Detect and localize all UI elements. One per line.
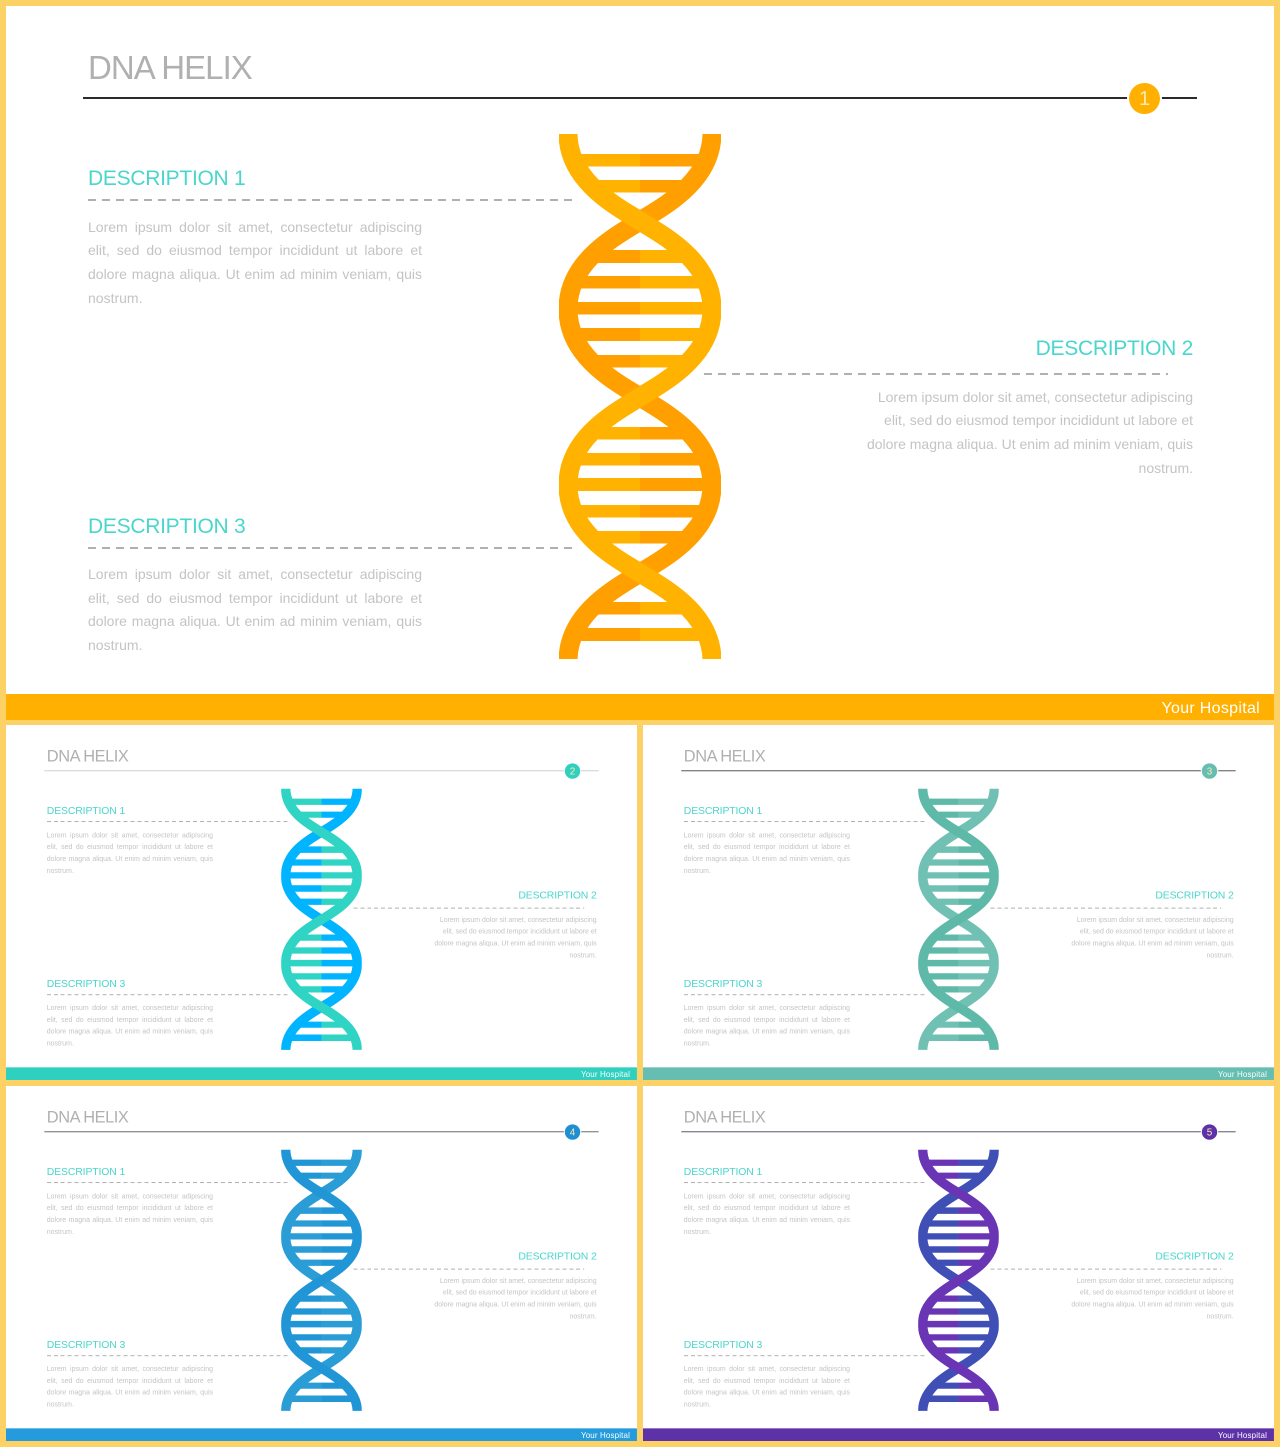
text block: description 1: elit, sed do eiusmod tempor incididunt ut labore et <box>684 843 850 850</box>
panel: slide 5, purple and indigo helix <box>643 1086 1274 1441</box>
text block: description 3 <box>684 1004 850 1047</box>
text block: description 1: elit, sed do eiusmod tempor incididunt ut labore et <box>684 1204 850 1211</box>
leader line: description 3 <box>684 993 927 996</box>
text block: description 3: Lorem ipsum dolor sit amet, consectetur adipiscing <box>47 1365 213 1373</box>
text block: description 3: dolore magna aliqua. Ut enim ad minim veniam, quis <box>88 613 422 629</box>
text block: description 3: nostrum. <box>47 1400 74 1408</box>
text block: description 1: dolore magna aliqua. Ut enim ad minim veniam, quis <box>684 1215 850 1223</box>
leader line: description 3 <box>88 547 576 549</box>
heading: description 1: DESCRIPTION 1 <box>684 1166 762 1178</box>
heading: description 3: DESCRIPTION 3 <box>684 978 762 990</box>
heading: DNA helix: DNA HELIX <box>684 1107 765 1126</box>
text block: description 3: Lorem ipsum dolor sit amet, consectetur adipiscing <box>684 1365 850 1373</box>
text block: description 1: nostrum. <box>47 866 74 874</box>
icon: DNA double helix <box>559 134 721 659</box>
text block: description 2: dolore magna aliqua. Ut enim ad minim veniam, quis <box>434 939 597 947</box>
leader line: description 3 <box>47 1354 290 1357</box>
text block: description 2: nostrum. <box>1207 951 1234 959</box>
text block: description 3: nostrum. <box>684 1039 711 1047</box>
text block: description 2 <box>434 915 597 959</box>
number badge 1: 1 <box>1139 88 1150 110</box>
heading: description 2: DESCRIPTION 2 <box>1155 890 1234 901</box>
heading: description 1: DESCRIPTION 1 <box>47 1166 125 1178</box>
text block: description 1: nostrum. <box>684 1227 711 1235</box>
text block: description 3: Lorem ipsum dolor sit amet, consectetur adipiscing <box>684 1004 850 1012</box>
text block: description 1 <box>47 1192 213 1235</box>
text block: description 1 <box>684 831 850 874</box>
text block: description 3: elit, sed do eiusmod tempor incididunt ut labore et <box>47 1015 213 1023</box>
text block: description 2: elit, sed do eiusmod tempor incididunt ut labore et <box>1080 927 1234 935</box>
text block: description 2 <box>1071 1276 1234 1320</box>
leader line: description 3 <box>47 993 290 996</box>
text block: description 2: nostrum. <box>570 951 597 959</box>
panel: slide 2, teal and blue helix <box>6 725 637 1080</box>
text block: description 2: dolore magna aliqua. Ut enim ad minim veniam, quis <box>1071 939 1234 947</box>
footer bar <box>643 1428 1274 1441</box>
text block: description 3 <box>684 1365 850 1408</box>
text block: description 1 <box>47 831 213 874</box>
panel: slide 4, blue helix <box>6 1086 637 1441</box>
text block: description 1: elit, sed do eiusmod tempor incididunt ut labore et <box>47 1204 213 1211</box>
number badge 4 <box>565 1124 580 1139</box>
text block: description 3: Lorem ipsum dolor sit amet, consectetur adipiscing <box>47 1004 213 1012</box>
text block: description 1 <box>684 1192 850 1235</box>
text block: description 2 <box>867 388 1193 476</box>
heading: description 3: DESCRIPTION 3 <box>88 515 245 538</box>
leader line: description 1 <box>684 1181 927 1184</box>
text block: description 2: Lorem ipsum dolor sit amet, consectetur adipiscing <box>1077 915 1234 923</box>
text block: description 1: Lorem ipsum dolor sit amet, consectetur adipiscing <box>684 1192 850 1200</box>
text block: description 3: dolore magna aliqua. Ut enim ad minim veniam, quis <box>684 1027 850 1035</box>
heading: DNA helix: DNA HELIX <box>47 746 128 765</box>
text block: description 1: nostrum. <box>47 1227 74 1235</box>
text block: description 2: nostrum. <box>570 1312 597 1320</box>
text block: description 1: dolore magna aliqua. Ut enim ad minim veniam, quis <box>47 854 213 862</box>
number badge 5: 5 <box>1207 1127 1212 1138</box>
header rule <box>681 769 1236 772</box>
footer bar <box>6 1067 637 1080</box>
text block: description 1: Lorem ipsum dolor sit amet, consectetur adipiscing <box>47 1192 213 1200</box>
text block: description 2: Lorem ipsum dolor sit amet, consectetur adipiscing <box>440 1276 597 1284</box>
text block: description 1 <box>88 218 422 306</box>
leader line: description 1 <box>88 199 576 201</box>
text block: description 3: elit, sed do eiusmod tempor incididunt ut labore et <box>684 1015 850 1023</box>
text block: description 2: elit, sed do eiusmod tempor incididunt ut labore et <box>443 1288 597 1296</box>
heading: description 2: DESCRIPTION 2 <box>518 1251 597 1262</box>
text block: description 3 <box>47 1004 213 1047</box>
number badge 3 <box>1202 763 1217 778</box>
text block: description 3 <box>88 566 422 653</box>
text block: description 3: nostrum. <box>88 637 142 653</box>
heading: description 3: DESCRIPTION 3 <box>684 1339 762 1351</box>
text block: description 2: dolore magna aliqua. Ut enim ad minim veniam, quis <box>1071 1300 1234 1308</box>
text block: description 2: Lorem ipsum dolor sit amet, consectetur adipiscing <box>1077 1276 1234 1284</box>
heading: description 1: DESCRIPTION 1 <box>88 167 245 190</box>
leader line: description 2 <box>353 907 584 910</box>
leader line: description 2 <box>990 907 1221 910</box>
number badge 4: 4 <box>570 1127 575 1138</box>
panel: main slide, orange helix <box>6 6 1274 720</box>
header rule <box>44 1130 599 1133</box>
text block: description 3: dolore magna aliqua. Ut enim ad minim veniam, quis <box>684 1388 850 1396</box>
text block: description 2: nostrum. <box>1207 1312 1234 1320</box>
text block: description 1: elit, sed do eiusmod tempor incididunt ut labore et <box>88 242 422 258</box>
icon: DNA double helix <box>281 1150 362 1411</box>
heading: description 3: DESCRIPTION 3 <box>47 978 125 990</box>
text block: description 2 <box>434 1276 597 1320</box>
header rule <box>83 97 1197 99</box>
text block: description 2 <box>1071 915 1234 959</box>
panel: slide 3, sea green helix <box>643 725 1274 1080</box>
text block: description 1: Lorem ipsum dolor sit amet, consectetur adipiscing <box>684 831 850 839</box>
heading: description 2: DESCRIPTION 2 <box>518 890 597 901</box>
icon: DNA double helix <box>281 788 362 1050</box>
heading: description 1: DESCRIPTION 1 <box>47 805 125 817</box>
number badge 2: 2 <box>570 766 575 777</box>
text block: description 3: dolore magna aliqua. Ut enim ad minim veniam, quis <box>47 1027 213 1035</box>
text block: description 3: elit, sed do eiusmod tempor incididunt ut labore et <box>47 1376 213 1384</box>
text block: description 1: dolore magna aliqua. Ut enim ad minim veniam, quis <box>47 1215 213 1223</box>
text block: description 1: elit, sed do eiusmod tempor incididunt ut labore et <box>47 843 213 850</box>
number badge 5 <box>1202 1124 1217 1139</box>
leader line: description 1 <box>47 1181 290 1184</box>
leader line: description 3 <box>684 1354 927 1357</box>
heading: description 3: DESCRIPTION 3 <box>47 1339 125 1351</box>
footer bar <box>6 1428 637 1441</box>
text block: description 1: dolore magna aliqua. Ut enim ad minim veniam, quis <box>684 854 850 862</box>
text block: description 3: elit, sed do eiusmod tempor incididunt ut labore et <box>88 590 422 606</box>
icon: DNA double helix <box>918 1150 999 1411</box>
text block: description 2: elit, sed do eiusmod tempor incididunt ut labore et <box>1080 1288 1234 1296</box>
footer bar: Your Hospital <box>581 1431 630 1440</box>
text block: description 3: Lorem ipsum dolor sit amet, consectetur adipiscing <box>88 566 422 582</box>
text block: description 3: nostrum. <box>684 1400 711 1408</box>
icon: DNA double helix <box>918 788 999 1050</box>
footer bar: Your Hospital <box>1162 700 1260 717</box>
leader line: description 2 <box>353 1268 584 1271</box>
text block: description 2: Lorem ipsum dolor sit amet, consectetur adipiscing <box>878 388 1193 404</box>
text block: description 2: elit, sed do eiusmod tempor incididunt ut labore et <box>884 412 1193 428</box>
leader line: description 2 <box>704 373 1168 375</box>
leader line: description 1 <box>684 820 927 823</box>
text block: description 2: dolore magna aliqua. Ut enim ad minim veniam, quis <box>867 436 1193 452</box>
text block: description 3: nostrum. <box>47 1039 74 1047</box>
footer bar: Your Hospital <box>581 1070 630 1079</box>
text block: description 1: Lorem ipsum dolor sit amet, consectetur adipiscing <box>88 218 422 234</box>
text block: description 3 <box>47 1365 213 1408</box>
leader line: description 1 <box>47 820 290 823</box>
heading: description 1: DESCRIPTION 1 <box>684 805 762 817</box>
text block: description 1: nostrum. <box>684 866 711 874</box>
text block: description 1: Lorem ipsum dolor sit amet, consectetur adipiscing <box>47 831 213 839</box>
number badge 2 <box>565 763 580 778</box>
heading: DNA helix: DNA HELIX <box>47 1107 128 1126</box>
footer bar <box>6 694 1274 720</box>
header rule <box>681 1130 1236 1133</box>
text block: description 2: Lorem ipsum dolor sit amet, consectetur adipiscing <box>440 915 597 923</box>
heading: DNA helix: DNA HELIX <box>684 746 765 765</box>
text block: description 3: dolore magna aliqua. Ut enim ad minim veniam, quis <box>47 1388 213 1396</box>
text block: description 3: elit, sed do eiusmod tempor incididunt ut labore et <box>684 1376 850 1384</box>
heading: DNA helix: DNA HELIX <box>88 48 252 86</box>
text block: description 1: dolore magna aliqua. Ut enim ad minim veniam, quis <box>88 266 422 282</box>
text block: description 2: dolore magna aliqua. Ut enim ad minim veniam, quis <box>434 1300 597 1308</box>
number badge 3: 3 <box>1207 766 1212 777</box>
heading: description 2: DESCRIPTION 2 <box>1036 337 1193 360</box>
footer bar: Your Hospital <box>1218 1070 1267 1079</box>
text block: description 1: nostrum. <box>88 290 142 306</box>
number badge 1 <box>1129 82 1160 114</box>
text block: description 2: nostrum. <box>1139 460 1193 476</box>
text block: description 2: elit, sed do eiusmod tempor incididunt ut labore et <box>443 927 597 935</box>
footer bar <box>643 1067 1274 1080</box>
footer bar: Your Hospital <box>1218 1431 1267 1440</box>
heading: description 2: DESCRIPTION 2 <box>1155 1251 1234 1262</box>
header rule <box>44 769 599 772</box>
leader line: description 2 <box>990 1268 1221 1271</box>
